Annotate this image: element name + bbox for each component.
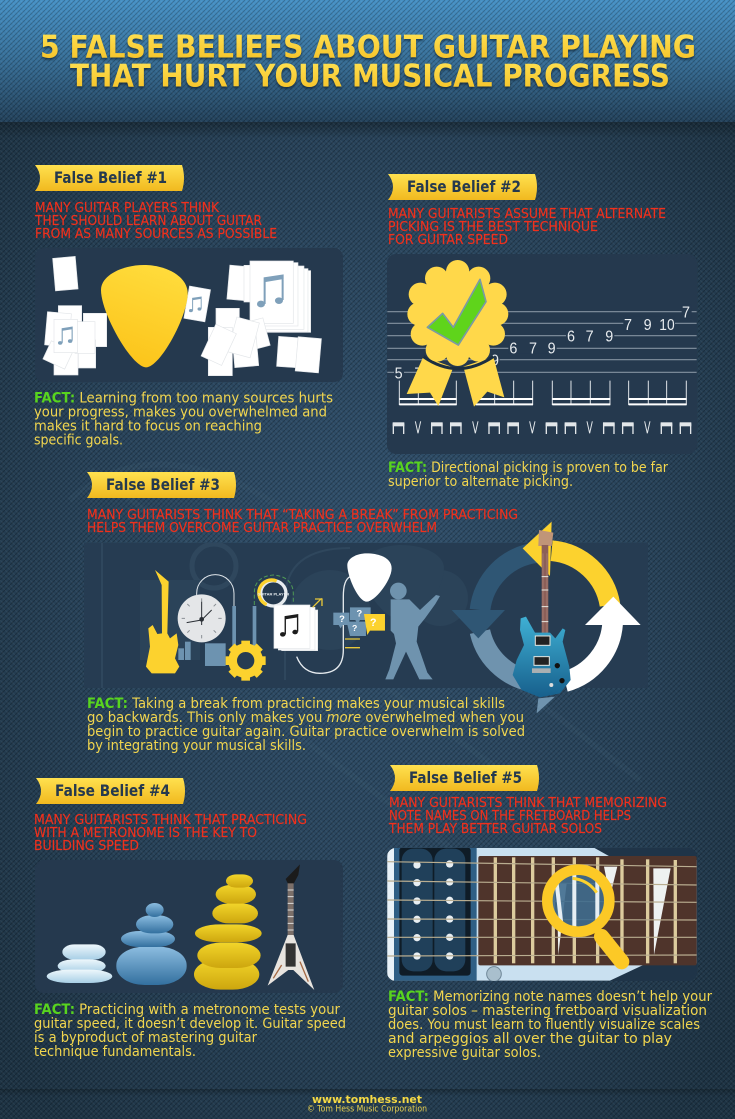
arches and bars xyxy=(178,575,350,673)
title: THAT HURT YOUR MUSICAL PROGRESS xyxy=(70,58,670,94)
icon: question bubbles: ? xyxy=(370,617,377,629)
tab numbers: 7 xyxy=(682,304,690,321)
section: false belief 2 xyxy=(387,174,697,490)
banner: false belief 2 xyxy=(388,174,537,200)
section: false belief 3 xyxy=(84,472,648,754)
tab numbers: 9 xyxy=(644,317,652,334)
note beams xyxy=(399,381,687,405)
belief text 3: MANY GUITARISTS THINK THAT “TAKING A BREAK” FROM PRACTICING xyxy=(87,508,518,523)
tab staff xyxy=(387,312,697,372)
belief text 4: MANY GUITARISTS THINK THAT PRACTICING xyxy=(34,813,307,828)
icon: progress ring xyxy=(257,580,289,606)
fact text 5: FACT: Memorizing note names doesn’t help your xyxy=(388,989,712,1005)
panel: pick and scattered sheet music xyxy=(35,248,343,382)
icon: question bubbles xyxy=(333,607,385,648)
tab numbers xyxy=(394,304,692,382)
fact text 1: FACT: Learning from too many sources hurts xyxy=(34,390,333,406)
fact text 2: FACT: Directional picking is proven to be far xyxy=(388,460,668,476)
icon: question bubbles: ? xyxy=(352,623,357,633)
belief text 2 xyxy=(388,207,666,248)
banner: false belief 3: False Belief #3 xyxy=(106,475,220,494)
belief text 1 xyxy=(34,201,277,242)
fact text 1: specific goals. xyxy=(34,432,123,448)
belief text 5 xyxy=(388,796,667,837)
footer: www.tomhess.net xyxy=(312,1094,422,1106)
belief text 3 xyxy=(87,508,518,536)
tab numbers: 6 xyxy=(567,329,575,346)
fact text 3: go backwards. This only makes you more overwhelmed when you xyxy=(87,710,524,726)
icon: sheet music stack xyxy=(274,598,322,651)
footer xyxy=(307,1094,427,1114)
belief text 5: THEM PLAY BETTER GUITAR SOLOS xyxy=(388,822,602,837)
icon: progress ring: GUITAR PLAYER xyxy=(257,592,289,597)
panel: stone stacks and v guitar xyxy=(35,860,343,993)
banner: false belief 1 xyxy=(35,165,184,191)
fact text 3: by integrating your musical skills. xyxy=(87,738,306,754)
fact text 5: does. You must learn to fluently visualize scales xyxy=(388,1017,700,1033)
icon: guitarist silhouette xyxy=(385,583,440,679)
fact text 5: guitar solos – mastering fretboard visualization xyxy=(388,1003,707,1019)
icon: v guitar xyxy=(268,864,314,990)
fact text 5 xyxy=(388,989,712,1061)
banner: false belief 2: False Belief #2 xyxy=(407,177,521,196)
fact text 4: technique fundamentals. xyxy=(34,1044,196,1060)
fact text 4: FACT: Practicing with a metronome tests your xyxy=(34,1002,340,1018)
tab numbers: 6 xyxy=(509,341,517,358)
white stones xyxy=(47,944,112,983)
icon: award badge with check xyxy=(407,260,508,407)
belief text 4: WITH A METRONOME IS THE KEY TO xyxy=(34,826,257,841)
strings xyxy=(387,862,697,956)
section: false belief 5 xyxy=(387,765,712,1061)
belief text 2: MANY GUITARISTS ASSUME THAT ALTERNATE xyxy=(388,207,666,222)
tab numbers: 7 xyxy=(529,341,537,358)
fact text 5: and arpeggios all over the guitar to play xyxy=(388,1031,672,1047)
belief text 3: HELPS THEM OVERCOME GUITAR PRACTICE OVERWHELM xyxy=(87,521,437,536)
fact text 3 xyxy=(87,696,525,754)
icon: magnifying glass xyxy=(547,870,622,962)
fact text 5: expressive guitar solos. xyxy=(388,1045,541,1061)
banner: false belief 5: False Belief #5 xyxy=(409,768,522,787)
banner: false belief 4: False Belief #4 xyxy=(55,781,170,800)
banner: false belief 5 xyxy=(390,765,539,791)
section: false belief 4 xyxy=(34,778,346,1060)
belief text 5: MANY GUITARISTS THINK THAT MEMORIZING xyxy=(389,796,667,811)
banner: false belief 4 xyxy=(36,778,185,804)
belief text 1: FROM AS MANY SOURCES AS POSSIBLE xyxy=(35,227,277,242)
belief text 1: MANY GUITAR PLAYERS THINK xyxy=(35,201,219,216)
footer: © Tom Hess Music Corporation xyxy=(307,1104,427,1114)
fact text 1: your progress, makes you overwhelmed and xyxy=(34,404,327,420)
tab numbers: 7 xyxy=(624,317,632,334)
fact text 2 xyxy=(388,460,668,490)
belief text 1: THEY SHOULD LEARN ABOUT GUITAR xyxy=(34,214,262,229)
fact text 2: superior to alternate picking. xyxy=(388,474,573,490)
panel: practice overwhelm illustration xyxy=(84,522,648,713)
icon: yellow electric guitar xyxy=(146,570,179,673)
cycle arrows xyxy=(480,551,613,682)
belief text 2: PICKING IS THE BEST TECHNIQUE xyxy=(388,220,598,235)
fact text 4: guitar speed, it doesn’t develop it. Guitar speed xyxy=(34,1016,346,1032)
icon: white pick xyxy=(347,553,392,602)
tab numbers: 10 xyxy=(659,317,675,334)
panel: fretboard with magnifier xyxy=(387,847,697,981)
icon: question bubbles: ? xyxy=(356,609,362,619)
blue stones xyxy=(116,903,187,985)
belief text 4 xyxy=(34,813,307,854)
tab numbers: 9 xyxy=(491,353,499,370)
title xyxy=(40,30,696,94)
yellow stones xyxy=(194,874,262,990)
tab numbers: 7 xyxy=(414,365,422,382)
pick strokes xyxy=(393,421,691,434)
icon: gear xyxy=(226,641,266,681)
section: false belief 1 xyxy=(34,165,343,448)
icon: blue electric guitar xyxy=(513,530,571,697)
pickup xyxy=(394,847,477,981)
icon: clock xyxy=(178,594,226,642)
fact text 1: makes it hard to focus on reaching xyxy=(34,418,262,434)
tab numbers: 7 xyxy=(586,329,594,346)
banner: false belief 1: False Belief #1 xyxy=(54,168,167,187)
banner: false belief 3 xyxy=(87,472,236,498)
belief text 2: FOR GUITAR SPEED xyxy=(388,233,508,248)
icon: question bubbles: ? xyxy=(339,614,345,624)
fact text 3: FACT: Taking a break from practicing makes your musical skills xyxy=(87,696,505,712)
fact text 3: begin to practice guitar again. Guitar practice overwhelm is solved xyxy=(87,724,525,740)
tab numbers: 9 xyxy=(605,329,613,346)
fact text 4 xyxy=(34,1002,346,1060)
fact text 1 xyxy=(34,390,333,448)
fretboard xyxy=(478,856,697,965)
panel: guitar tab with award badge xyxy=(387,254,697,454)
tab numbers: 9 xyxy=(548,341,556,358)
tab numbers: 5 xyxy=(395,365,403,382)
belief text 5: NOTE NAMES ON THE FRETBOARD HELPS xyxy=(389,809,631,824)
belief text 4: BUILDING SPEED xyxy=(34,839,139,854)
fact text 4: is a byproduct of mastering guitar xyxy=(34,1030,257,1046)
